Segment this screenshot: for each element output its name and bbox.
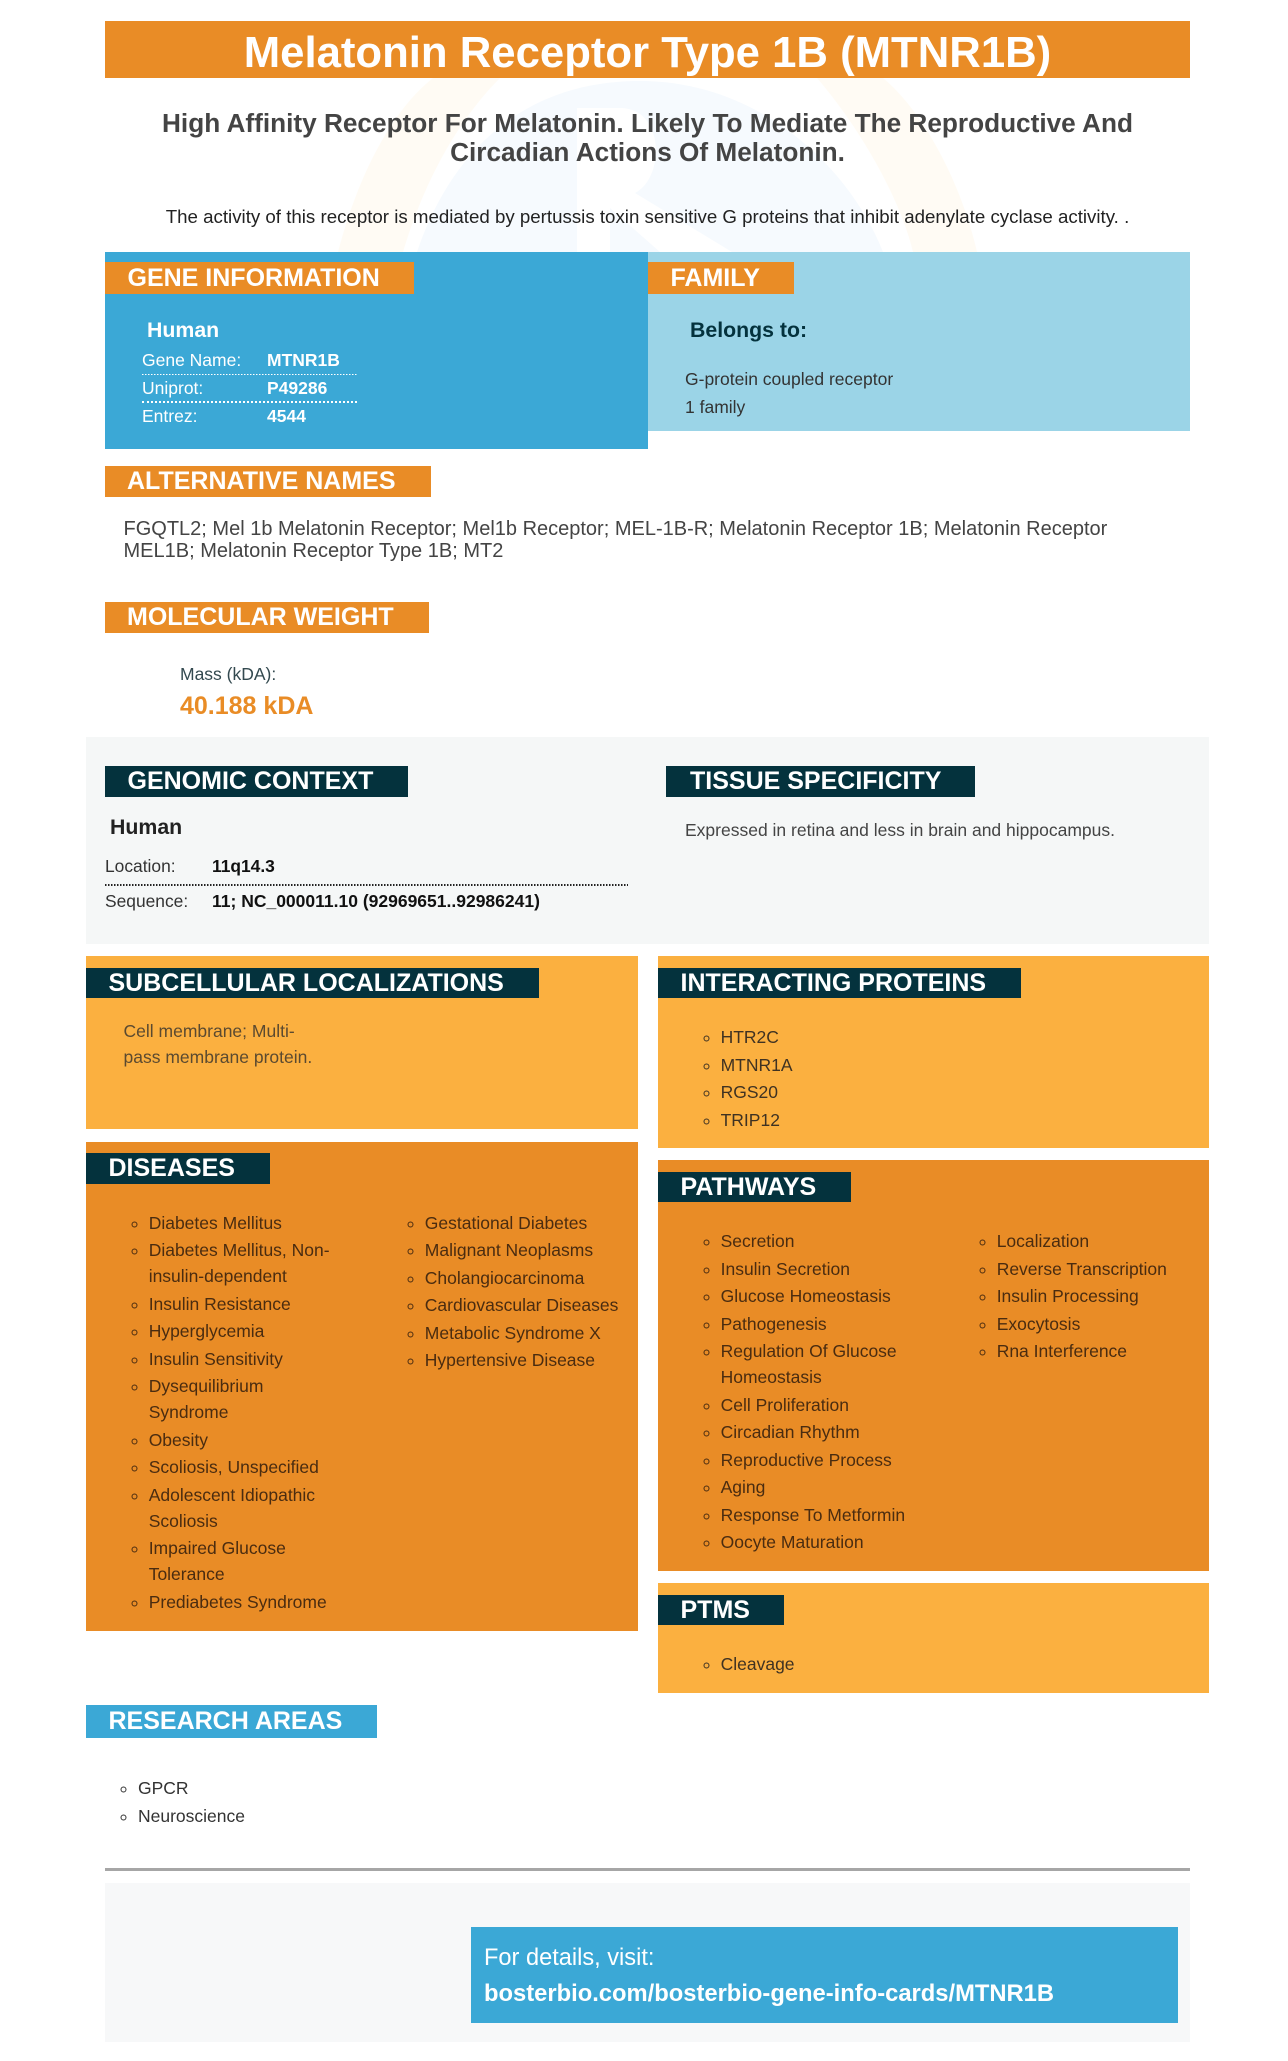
- ptm list: Cleavage: [721, 1654, 795, 1674]
- pathway list column 1: Regulation Of Glucose: [721, 1341, 897, 1361]
- heading: family: [648, 262, 794, 294]
- subcellular text: [124, 1021, 312, 1067]
- gene table: Gene Name:: [142, 350, 241, 370]
- details label: For details, visit:: [484, 1945, 654, 1971]
- heading: genomic context: GENOMIC CONTEXT: [128, 767, 373, 795]
- pathway list column 1: Glucose Homeostasis: [721, 1286, 891, 1306]
- heading: gene information: GENE INFORMATION: [128, 264, 380, 292]
- mass label: Mass (kDA):: [180, 664, 276, 684]
- pathway list column 1: Response To Metformin: [721, 1504, 905, 1524]
- heading: research areas: RESEARCH AREAS: [108, 1707, 342, 1735]
- family text: 1 family: [685, 397, 745, 417]
- heading: research areas: [86, 1705, 377, 1738]
- panel: subcellular localizations: [86, 956, 638, 1129]
- pathway list column 2: Rna Interference: [997, 1341, 1127, 1361]
- disease list column 2: Hypertensive Disease: [425, 1350, 595, 1370]
- disease list column 1: Scoliosis, Unspecified: [149, 1457, 319, 1477]
- mass value: 40.188 kDA: [180, 692, 313, 720]
- pathway list column 1: Homeostasis: [721, 1367, 822, 1387]
- disease list column 2: [408, 1212, 618, 1370]
- disease list column 1: Diabetes Mellitus: [149, 1212, 282, 1232]
- gene table: P49286: [267, 378, 327, 398]
- disease list column 1: Insulin Sensitivity: [149, 1348, 283, 1368]
- panel: ptms: [658, 1583, 1209, 1693]
- pathway list column 1: Insulin Secretion: [721, 1258, 850, 1278]
- pathway list column 1: Pathogenesis: [721, 1314, 827, 1334]
- alternative names text: MEL1B; Melatonin Receptor Type 1B; MT2: [124, 540, 503, 562]
- protein list: TRIP12: [721, 1110, 780, 1130]
- subtitle: [162, 108, 1133, 167]
- gene table: MTNR1B: [267, 350, 340, 370]
- pathway list column 2: Reverse Transcription: [997, 1258, 1167, 1278]
- family text: [685, 369, 893, 417]
- disease list column 1: Insulin Resistance: [149, 1294, 291, 1314]
- disease list column 2: Metabolic Syndrome X: [425, 1322, 601, 1342]
- alternative names text: FGQTL2; Mel 1b Melatonin Receptor; Mel1b Receptor; MEL-1B-R; Melatonin Receptor 1B; Melatonin Receptor: [124, 518, 1107, 540]
- panel: footer: [105, 1883, 1190, 2042]
- disease list column 1: Obesity: [149, 1430, 208, 1450]
- subcellular text: Cell membrane; Multi-: [124, 1021, 295, 1041]
- protein list: HTR2C: [721, 1027, 779, 1047]
- panel: gene information: [105, 252, 648, 449]
- heading: ptms: PTMS: [680, 1596, 750, 1624]
- gene table: Entrez:: [142, 406, 197, 426]
- heading: diseases: DISEASES: [108, 1154, 235, 1182]
- tissue specificity text: Expressed in retina and less in brain and hippocampus.: [685, 820, 1115, 840]
- disease list column 1: Prediabetes Syndrome: [149, 1592, 327, 1612]
- disease list column 1: Tolerance: [149, 1564, 225, 1584]
- panel: pathways: [658, 1160, 1209, 1571]
- disease list column 1: Diabetes Mellitus, Non-: [149, 1240, 330, 1260]
- pathway list column 1: Aging: [721, 1477, 765, 1497]
- heading: subcellular localizations: SUBCELLULAR LOCALIZATIONS: [108, 969, 504, 997]
- pathway list column 2: Exocytosis: [997, 1314, 1080, 1334]
- disease list column 1: Dysequilibrium: [149, 1376, 263, 1396]
- location row: Location:: [105, 856, 176, 876]
- panel: genomic context and tissue specificity: [86, 737, 1209, 944]
- disease list column 2: Malignant Neoplasms: [425, 1240, 593, 1260]
- heading: diseases: [86, 1153, 270, 1184]
- belongs to label: Belongs to:: [690, 318, 807, 342]
- disease list column 1: Scoliosis: [149, 1510, 218, 1530]
- heading: ptms: [658, 1595, 784, 1625]
- sequence row: Sequence:: [105, 891, 188, 911]
- species label: Human: [147, 318, 219, 342]
- pathway list column 1: [704, 1231, 905, 1552]
- disease list column 2: Cholangiocarcinoma: [425, 1268, 584, 1288]
- species label: Human: [110, 815, 182, 839]
- heading: interacting proteins: INTERACTING PROTEINS: [680, 969, 986, 997]
- disease list column 2: Gestational Diabetes: [425, 1212, 587, 1232]
- panel: diseases: [86, 1142, 638, 1631]
- pathway list column 1: Circadian Rhythm: [721, 1422, 860, 1442]
- gene table: Uniprot:: [142, 378, 203, 398]
- gene table: [142, 350, 357, 426]
- location row: [105, 856, 275, 876]
- sequence row: 11; NC_000011.10 (92969651..92986241): [212, 891, 540, 911]
- disease list column 2: Cardiovascular Diseases: [425, 1295, 618, 1315]
- subcellular text: pass membrane protein.: [124, 1047, 312, 1067]
- disease list column 1: Impaired Glucose: [149, 1538, 286, 1558]
- disease list column 1: Adolescent Idiopathic: [149, 1484, 315, 1504]
- pathway list column 1: Oocyte Maturation: [721, 1532, 864, 1552]
- research area list: Neuroscience: [138, 1806, 245, 1826]
- title: [105, 21, 1190, 78]
- disease list column 1: [132, 1212, 330, 1612]
- protein list: RGS20: [721, 1082, 778, 1102]
- research area list: [120, 1778, 245, 1826]
- location row: 11q14.3: [212, 856, 275, 876]
- heading: pathways: [658, 1172, 851, 1202]
- heading: alternative names: ALTERNATIVE NAMES: [127, 467, 396, 495]
- research area list: GPCR: [138, 1778, 189, 1798]
- panel: interacting proteins: [658, 956, 1209, 1148]
- watermark logo: [338, 78, 977, 252]
- title: Melatonin Receptor Type 1B (MTNR1B): [244, 28, 1051, 77]
- family text: G-protein coupled receptor: [685, 369, 893, 389]
- call to action: [471, 1927, 1178, 2023]
- disease list column 1: Hyperglycemia: [149, 1321, 264, 1341]
- disease list column 1: insulin-dependent: [149, 1266, 287, 1286]
- panel: family: [648, 252, 1190, 431]
- pathway list column 1: Reproductive Process: [721, 1450, 892, 1470]
- heading: tissue specificity: TISSUE SPECIFICITY: [690, 767, 941, 795]
- heading: family: FAMILY: [670, 264, 760, 292]
- heading: pathways: PATHWAYS: [680, 1173, 816, 1201]
- pathway list column 1: Secretion: [721, 1231, 795, 1251]
- protein list: [704, 1027, 793, 1130]
- gene table: 4544: [267, 406, 306, 426]
- pathway list column 1: Cell Proliferation: [721, 1394, 849, 1414]
- disease list column 1: Syndrome: [149, 1402, 228, 1422]
- pathway list column 2: [980, 1231, 1167, 1361]
- heading: molecular weight: MOLECULAR WEIGHT: [127, 603, 394, 631]
- alternative names text: [124, 518, 1107, 562]
- details link: bosterbio.com/bosterbio-gene-info-cards/MTNR1B: [484, 1980, 1054, 2007]
- subtitle: High Affinity Receptor For Melatonin. Likely To Mediate The Reproductive And: [162, 108, 1133, 138]
- subtitle: Circadian Actions Of Melatonin.: [450, 137, 845, 167]
- description: The activity of this receptor is mediated by pertussis toxin sensitive G proteins that inhibit adenylate cyclase activity. .: [166, 206, 1129, 227]
- pathway list column 2: Localization: [997, 1231, 1089, 1251]
- pathway list column 2: Insulin Processing: [997, 1286, 1139, 1306]
- protein list: MTNR1A: [721, 1054, 793, 1074]
